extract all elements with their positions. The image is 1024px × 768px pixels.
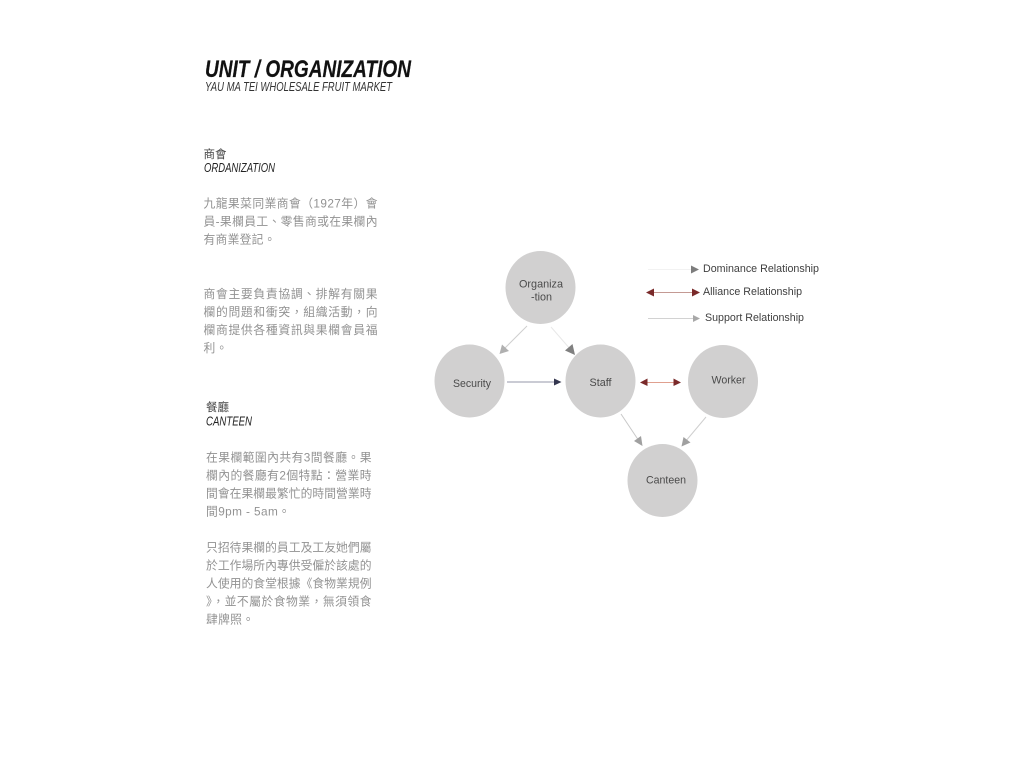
title: YAU MA TEI WHOLESALE FRUIT MARKET [205,80,393,94]
text block: canteen staff rule: 人使用的食堂根據《食物業規例 [206,576,372,590]
arrow: security to staff [507,378,562,386]
text block: canteen hours: 間9pm - 5am。 [206,504,290,518]
arrow: organization to staff [551,327,575,355]
legend: alliance [646,286,802,298]
relationship diagram [434,251,758,517]
node: staff: Staff [590,377,612,389]
text block: canteen hours: 間會在果欄最繁忙的時間營業時 [206,486,372,500]
heading: organization: ORDANIZATION [204,161,276,175]
legend: support: Support Relationship [705,312,804,324]
text block: organization duties: 利。 [204,341,228,355]
arrow: worker to canteen [682,417,706,446]
text block: canteen staff rule: 只招待果欄的員工及工友她們屬 [206,540,372,554]
text block: organization membership: 員-果欄員工、零售商或在果欄內 [204,214,378,228]
node: worker [688,345,758,418]
text block: organization duties [204,287,378,355]
text block: canteen staff rule [206,540,372,626]
text block: canteen hours [206,450,372,518]
legend: alliance: Alliance Relationship [703,286,802,298]
node: organization: -tion [531,292,552,304]
title [205,56,412,94]
text block: organization duties: 商會主要負責協調、排解有關果 [204,287,378,301]
legend: support [648,312,804,324]
text block: canteen staff rule: 肆牌照。 [206,612,254,626]
node: canteen [628,444,698,517]
node: security [434,344,504,418]
text block: organization membership: 九龍果菜同業商會（1927年）會 [204,196,378,210]
node: security: Security [453,378,491,390]
heading: organization [204,147,276,175]
node: staff [566,344,636,418]
title: UNIT / ORGANIZATION [205,56,412,83]
text block: organization duties: 欄的問題和衝突，組織活動，向 [204,305,378,319]
arrow: staff to canteen [621,414,642,446]
node: organization [506,251,576,324]
text block: canteen staff rule: 》，並不屬於食物業，無須領食 [206,594,372,608]
text block: organization duties: 欄商提供各種資訊與果欄會員福 [204,323,378,337]
arrow: staff alliance worker [640,378,681,386]
text block: canteen staff rule: 於工作場所內專供受僱於該處的 [206,558,372,572]
heading: organization: 商會 [204,147,227,161]
node: worker: Worker [712,374,746,386]
text block: canteen hours: 欄內的餐廳有2個特點：營業時 [206,468,372,482]
text block: canteen hours: 在果欄範圍內共有3間餐廳。果 [206,450,372,464]
heading: canteen [206,400,253,428]
node: canteen: Canteen [646,474,686,486]
heading: canteen: 餐廳 [206,400,230,414]
arrow: organization to security [500,326,527,354]
legend: dominance: Dominance Relationship [703,263,819,275]
node: organization: Organiza [519,278,564,290]
text block: organization membership [204,196,378,246]
legend [646,263,819,324]
legend: dominance [648,263,819,275]
text block: organization membership: 有商業登記。 [204,232,276,246]
heading: canteen: CANTEEN [206,414,253,428]
